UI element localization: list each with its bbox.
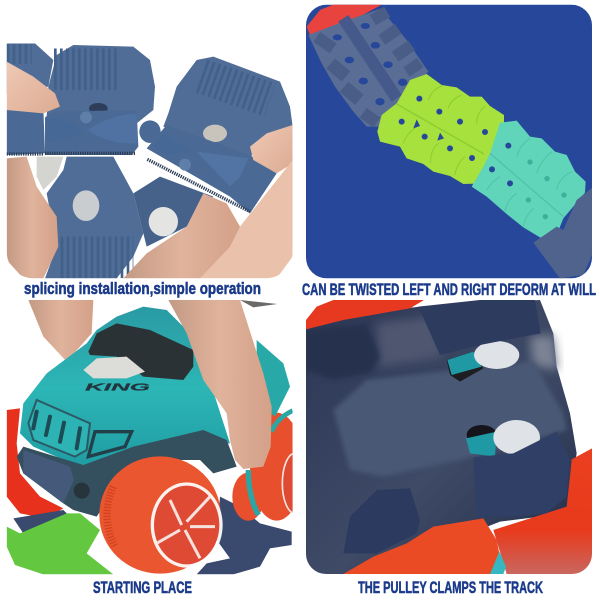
grey side highlight bbox=[530, 335, 558, 370]
car body bbox=[20, 307, 290, 468]
comb ribs bbox=[7, 54, 270, 257]
windshield bbox=[88, 323, 193, 380]
teal track segment bbox=[472, 121, 586, 239]
navy track segment bbox=[308, 7, 428, 127]
bottom wheel bbox=[343, 518, 506, 574]
panel: splicing installation photo bbox=[7, 43, 293, 278]
right wheel bbox=[493, 448, 592, 574]
model name: KING bbox=[85, 383, 151, 394]
track flaps bbox=[7, 43, 293, 278]
lighter body panel bbox=[333, 362, 567, 477]
navy track lower right bbox=[533, 187, 593, 278]
upper left block bbox=[306, 323, 380, 380]
panel: twisted blue track photo bbox=[306, 5, 593, 278]
caption: splicing installation: splicing installation,simple operation bbox=[24, 279, 261, 298]
lower pulley bbox=[466, 420, 540, 457]
top pulley bbox=[447, 341, 519, 382]
panel: pulley close-up photo bbox=[306, 300, 592, 574]
windshield highlight bbox=[83, 357, 145, 378]
front wheel bbox=[99, 456, 223, 574]
panel: car starting place photo bbox=[7, 300, 308, 574]
teal segment holes bbox=[489, 143, 513, 186]
fingers bbox=[7, 62, 293, 278]
grille slats bbox=[33, 412, 80, 448]
grille bbox=[28, 400, 90, 457]
right finger bbox=[168, 300, 272, 469]
red track piece bbox=[307, 5, 382, 35]
bottom left block bbox=[343, 488, 420, 553]
navy body bbox=[306, 300, 577, 574]
dark blue track bbox=[197, 497, 292, 574]
holes in flaps bbox=[73, 103, 227, 236]
blue background bbox=[306, 5, 592, 278]
top clamp block bbox=[418, 300, 541, 355]
red rear wheel bbox=[7, 408, 63, 518]
left finger bbox=[28, 300, 93, 362]
track connectors bbox=[7, 108, 277, 213]
grey shadow behind track bbox=[37, 157, 63, 190]
front clamp block bbox=[473, 432, 570, 517]
headlight decal bbox=[88, 432, 132, 457]
caption: starting place: STARTING PLACE bbox=[93, 579, 192, 597]
knife-edge shadow bbox=[240, 300, 277, 307]
right wheel bbox=[232, 408, 293, 521]
car chassis bbox=[17, 430, 237, 517]
green track bbox=[7, 513, 113, 574]
grey upper highlights bbox=[377, 317, 443, 367]
green segment holes bbox=[399, 96, 488, 161]
red top-left wheel bbox=[306, 300, 424, 329]
navy segment holes bbox=[333, 23, 407, 105]
green track segment bbox=[377, 74, 504, 184]
dark track under wheel bbox=[13, 510, 70, 533]
